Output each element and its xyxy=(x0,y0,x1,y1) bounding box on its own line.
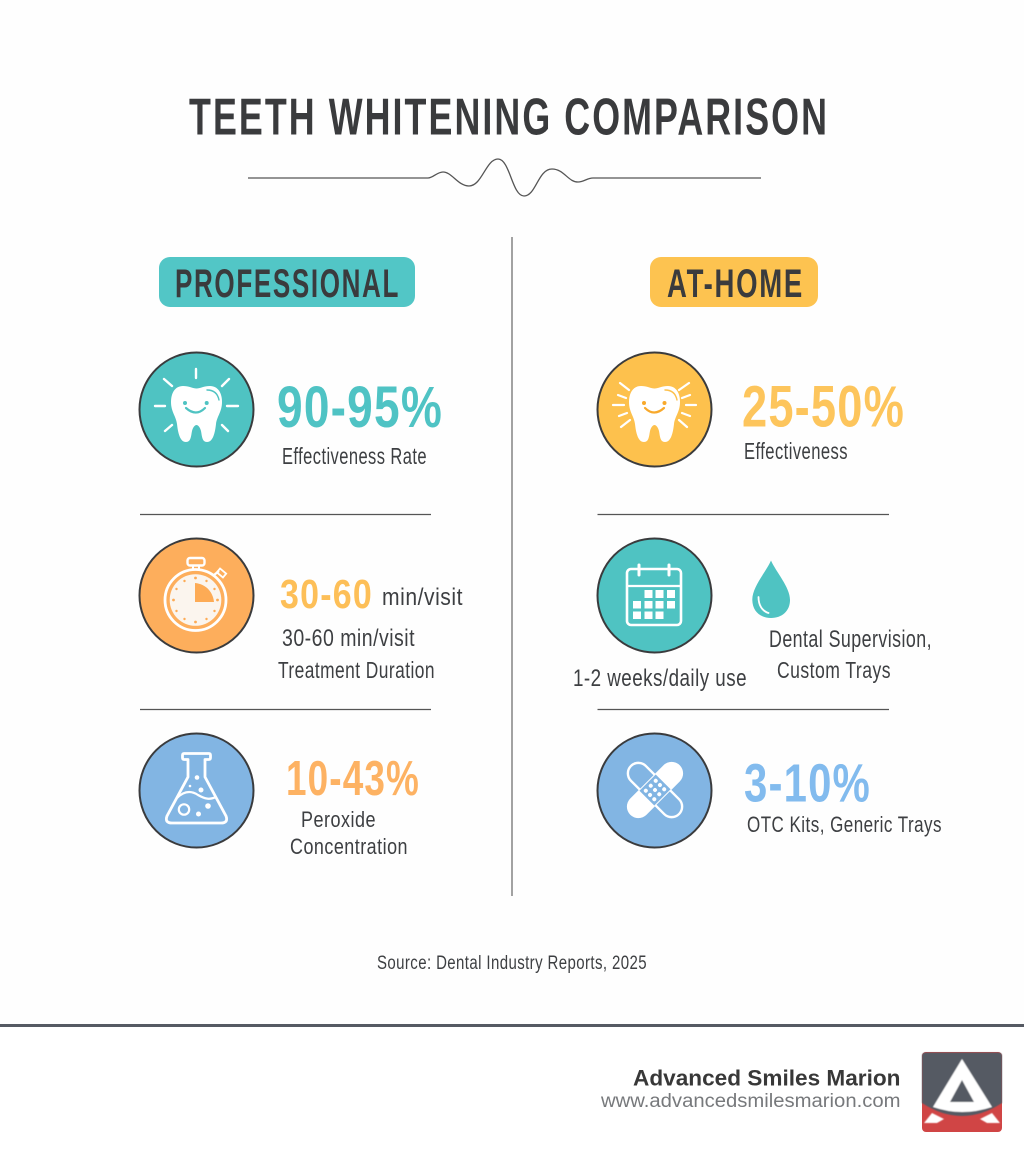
label: dental supervision, custom trays: Dental Supervision, xyxy=(769,626,932,653)
icon: calendar xyxy=(598,538,712,652)
stat: 3-10% otc kits, generic trays xyxy=(744,754,942,837)
icon: smiling tooth yellow xyxy=(598,352,712,466)
label: dental supervision, custom trays xyxy=(769,626,932,683)
stat: 10-43% peroxide concentration xyxy=(286,752,420,859)
stat: 90-95% effectiveness rate: 90-95% xyxy=(277,375,443,440)
heading: professional: PROFESSIONAL xyxy=(175,262,400,306)
stat: 10-43% peroxide concentration: Peroxide xyxy=(301,807,376,832)
stat: 30-60 min/visit treatment duration: min/visit xyxy=(382,584,463,611)
heading: professional xyxy=(159,257,415,307)
stat: 10-43% peroxide concentration: Concentration xyxy=(290,834,408,859)
stat: 25-50% effectiveness: 25-50% xyxy=(742,374,905,440)
stat: 30-60 min/visit treatment duration xyxy=(278,571,463,683)
stat: 30-60 min/visit treatment duration: 30-60 min/visit xyxy=(282,625,415,652)
source note: Source: Dental Industry Reports, 2025 xyxy=(377,953,647,974)
brand name: Advanced Smiles Marion xyxy=(633,1066,900,1090)
icon: flask xyxy=(140,734,254,848)
icon: smiling tooth teal xyxy=(140,352,254,466)
footer xyxy=(0,1024,1024,1154)
icon: stopwatch xyxy=(140,538,254,652)
stat: 30-60 min/visit treatment duration: 30-60 xyxy=(280,571,373,617)
stat: 10-43% peroxide concentration: 10-43% xyxy=(286,752,420,806)
stat: 30-60 min/visit treatment duration: Treatment Duration xyxy=(278,657,435,683)
center column divider xyxy=(511,237,513,896)
heading: at-home: AT-HOME xyxy=(667,262,804,306)
heading: at-home xyxy=(650,257,818,307)
stat: 3-10% otc kits, generic trays: OTC Kits, Generic Trays xyxy=(747,812,942,837)
label: 1-2 weeks/daily use: 1-2 weeks/daily use xyxy=(573,665,747,692)
stat: 25-50% effectiveness: Effectiveness xyxy=(744,438,848,464)
logo xyxy=(922,1052,1002,1132)
wave divider under title xyxy=(248,159,761,196)
icon: water drop xyxy=(752,560,790,618)
stat: 25-50% effectiveness xyxy=(742,374,905,464)
label: dental supervision, custom trays: Custom Trays xyxy=(777,657,891,683)
icon: bandage xyxy=(598,734,712,848)
website: www.advancedsmilesmarion.com xyxy=(600,1091,900,1112)
panel: professional xyxy=(140,257,463,859)
stat: 90-95% effectiveness rate xyxy=(277,375,443,469)
panel: at-home xyxy=(573,257,942,848)
stat: 90-95% effectiveness rate: Effectiveness Rate xyxy=(282,443,427,469)
stat: 3-10% otc kits, generic trays: 3-10% xyxy=(744,754,871,814)
